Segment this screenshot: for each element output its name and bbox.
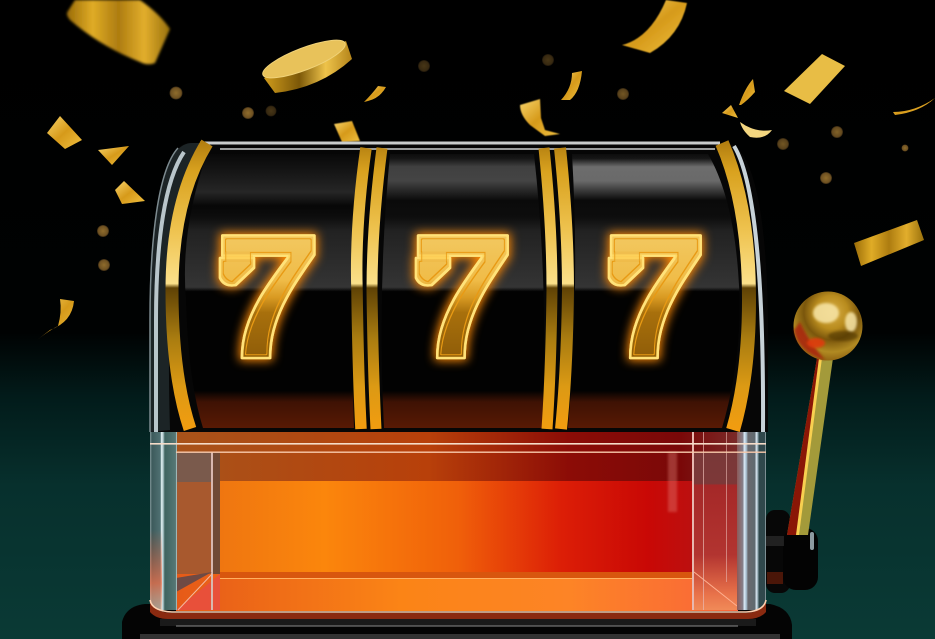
lever shaft (787, 358, 833, 535)
lower glass case (150, 431, 766, 626)
glass dome (150, 143, 768, 432)
third 7: 7 (603, 198, 709, 397)
777 glowing numerals (214, 197, 709, 397)
gold coin large, top left (67, 0, 170, 64)
second divider (544, 148, 568, 429)
reel 2 (382, 154, 544, 428)
right gold ring (722, 143, 749, 430)
left gold ring (172, 143, 207, 429)
machine base (122, 604, 792, 639)
first 7: 7 (214, 197, 323, 396)
right glass column (737, 432, 766, 610)
confetti pieces (37, 0, 935, 340)
darker top wall band (176, 432, 737, 481)
lever (766, 292, 862, 593)
gold coin, tilted (259, 33, 352, 93)
horizontal glass edges (150, 431, 766, 453)
lever gold ball (794, 292, 862, 360)
left glass column (150, 432, 177, 610)
falling gold confetti and coins (37, 0, 935, 340)
reel drum (150, 143, 768, 432)
floor front edge (150, 600, 766, 626)
reel 1 (185, 154, 363, 428)
right inner glass panel (668, 432, 737, 610)
reel 3 (568, 154, 740, 428)
second 7: 7 (410, 198, 516, 397)
left inner glass panel (176, 452, 220, 610)
bokeh dots (97, 54, 908, 271)
first divider (357, 148, 382, 429)
lever knob base (766, 510, 818, 593)
lit orange wall (220, 481, 695, 573)
case floor (176, 572, 738, 611)
